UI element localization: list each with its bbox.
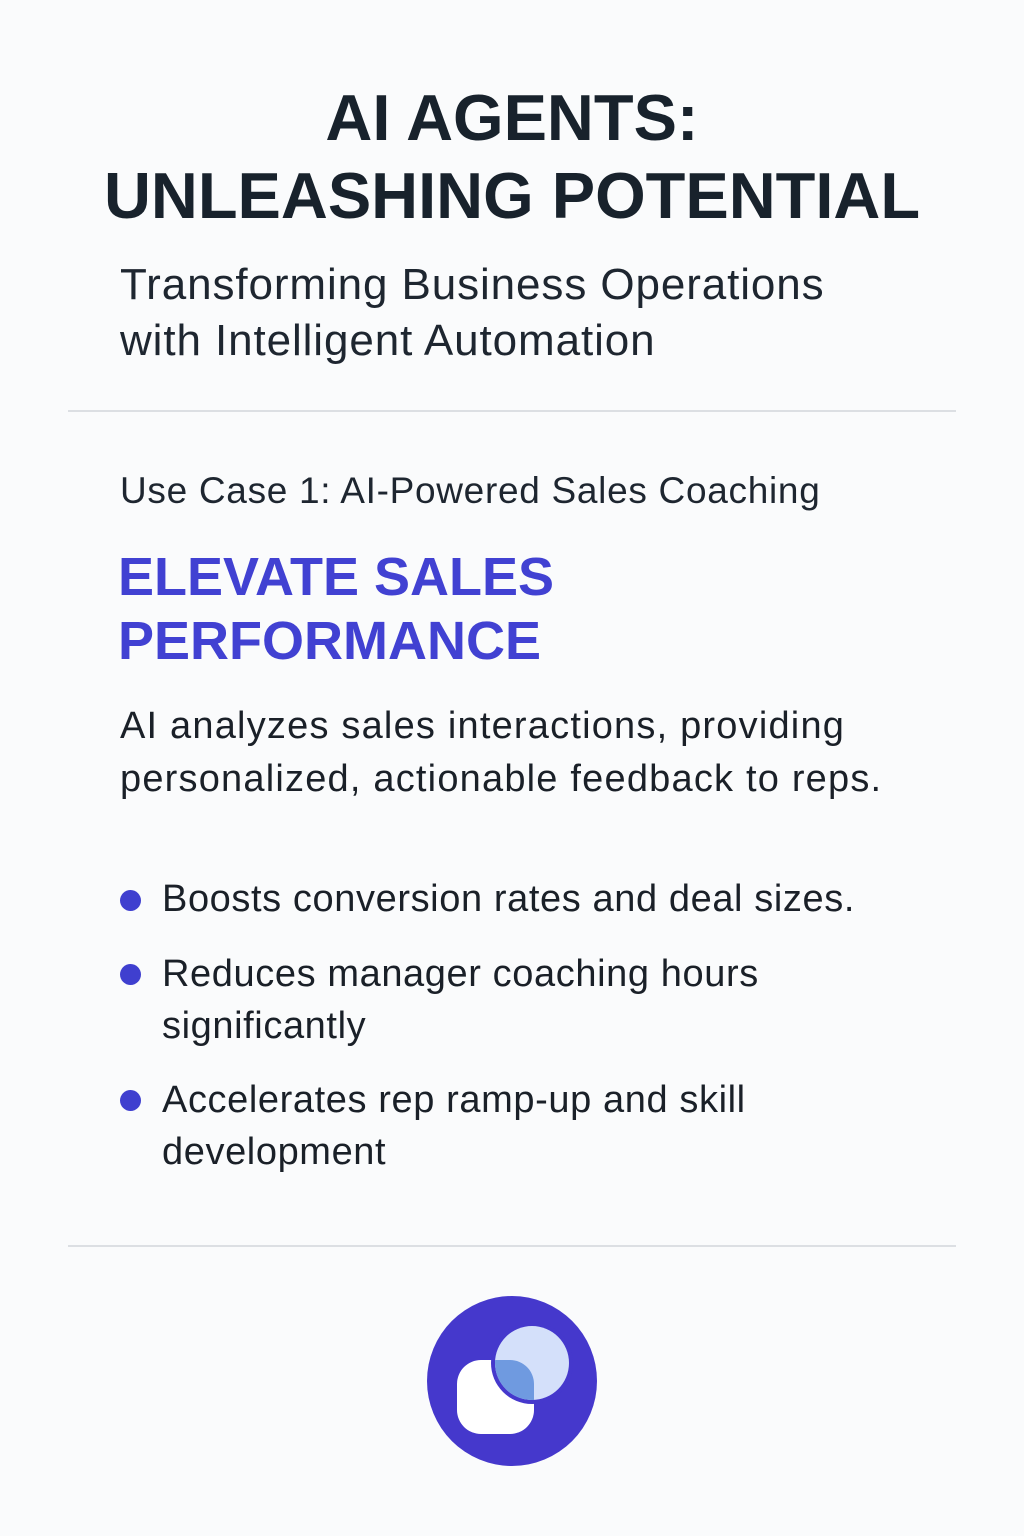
heading: ELEVATE SALES bbox=[118, 547, 554, 607]
title bbox=[104, 81, 920, 232]
description: personalized, actionable feedback to reps. bbox=[120, 758, 882, 800]
title: UNLEASHING POTENTIAL bbox=[104, 159, 920, 232]
icon: logo bbox=[427, 1296, 597, 1466]
bullet list: Reduces manager coaching hours bbox=[162, 953, 759, 995]
subtitle bbox=[120, 260, 825, 365]
subtitle: with Intelligent Automation bbox=[120, 316, 656, 365]
description: AI analyzes sales interactions, providing bbox=[120, 705, 845, 747]
subtitle: Transforming Business Operations bbox=[120, 260, 825, 309]
bullet list: development bbox=[162, 1131, 386, 1173]
bullet list: Accelerates rep ramp-up and skill bbox=[162, 1079, 746, 1121]
heading: PERFORMANCE bbox=[118, 611, 541, 671]
bullet 3 bbox=[120, 1079, 746, 1173]
bullet 2 bbox=[120, 953, 759, 1047]
bullet 1 bbox=[120, 878, 855, 920]
bullet list: Boosts conversion rates and deal sizes. bbox=[162, 878, 855, 920]
title: AI AGENTS: bbox=[325, 81, 699, 154]
heading bbox=[118, 547, 554, 671]
bullet list bbox=[120, 878, 855, 1173]
description bbox=[120, 705, 882, 800]
use case label: Use Case 1: AI-Powered Sales Coaching bbox=[120, 470, 820, 511]
bullet list: significantly bbox=[162, 1005, 366, 1047]
